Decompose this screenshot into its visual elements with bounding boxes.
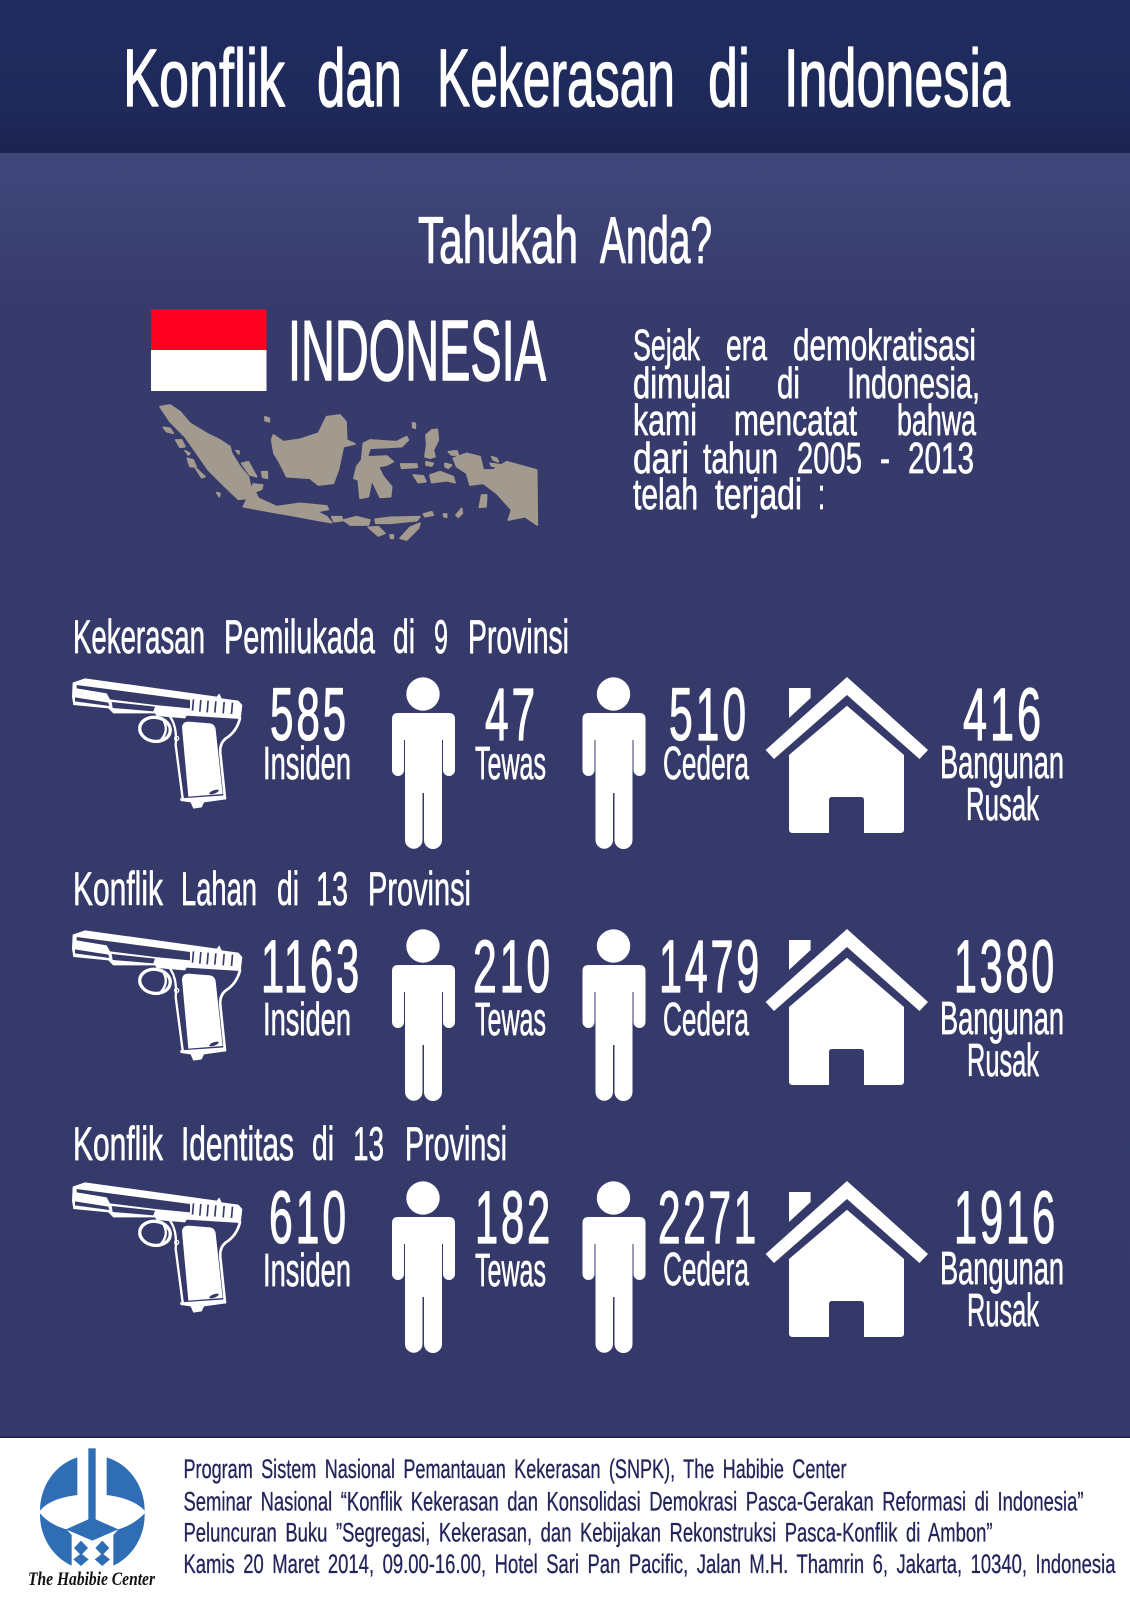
- stat: 1479 cedera: 1479: [659, 925, 762, 1008]
- title: dan: [317, 33, 402, 124]
- intro paragraph: :: [818, 470, 825, 519]
- stat: 1916 bangunan rusak: Rusak: [967, 1284, 1040, 1336]
- title: Kekerasan: [437, 33, 675, 124]
- panel: Konflik Identitas: [72, 1117, 1064, 1353]
- intro paragraph: [633, 321, 980, 519]
- intro paragraph: di: [777, 359, 800, 408]
- header band: [0, 0, 1130, 153]
- stat: 510 cedera: 510: [669, 673, 749, 756]
- intro paragraph: demokratisasi: [793, 321, 976, 370]
- heading: row 1: Pemilukada: [224, 610, 376, 663]
- title: Indonesia: [784, 33, 1010, 124]
- icon: house: [766, 1181, 928, 1337]
- footer text block: [184, 1454, 1116, 1579]
- stat: 585 insiden: 585: [270, 673, 349, 756]
- subheading: Tahukah Anda: Tahukah: [418, 203, 578, 277]
- intro paragraph: kami: [633, 396, 697, 445]
- stat: 610 insiden: Insiden: [263, 1244, 351, 1296]
- heading: row 2: 13: [316, 862, 348, 915]
- icon: Indonesian flag: [151, 310, 266, 391]
- stat: 1479 cedera: [659, 925, 762, 1045]
- stat: 1479 cedera: Cedera: [663, 993, 749, 1045]
- intro paragraph: 2013: [908, 434, 974, 483]
- intro paragraph: -: [880, 434, 890, 483]
- stat: 510 cedera: [663, 673, 749, 789]
- stat: 610 insiden: 610: [269, 1176, 349, 1259]
- icon: person killed: [392, 1181, 455, 1353]
- stat: 1163 insiden: [261, 925, 362, 1045]
- stat: 1163 insiden: 1163: [261, 925, 362, 1008]
- map of Indonesia: [160, 405, 537, 540]
- icon: house: [766, 677, 928, 833]
- footer panel: [0, 1436, 1130, 1600]
- stat: 47 tewas: [475, 673, 546, 789]
- heading: row 3: Provinsi: [405, 1117, 507, 1170]
- subheading: Tahukah Anda: Anda?: [600, 203, 712, 277]
- title: [123, 33, 1010, 124]
- heading: row 3: di: [312, 1117, 334, 1170]
- stat: 47 tewas: 47: [485, 673, 538, 756]
- intro paragraph: tahun: [703, 434, 778, 483]
- intro paragraph: terjadi: [715, 470, 802, 519]
- stat: 1163 insiden: Insiden: [263, 993, 351, 1045]
- icon: house: [766, 929, 928, 1085]
- stat: 416 bangunan rusak: [940, 673, 1064, 830]
- title: di: [708, 33, 750, 124]
- icon: person killed: [392, 929, 455, 1101]
- intro paragraph: dari: [633, 434, 689, 483]
- stat: 510 cedera: Cedera: [663, 737, 749, 789]
- stat: 610 insiden: [263, 1176, 351, 1296]
- heading: row 3: 13: [353, 1117, 384, 1170]
- stat: 210 tewas: [473, 925, 553, 1045]
- stat: 585 insiden: [263, 673, 351, 789]
- heading: row 3: [73, 1117, 507, 1170]
- stat: 210 tewas: Tewas: [475, 993, 546, 1045]
- icon: person injured: [582, 929, 646, 1101]
- stat: 182 tewas: [475, 1176, 553, 1296]
- heading: row 2: Provinsi: [368, 862, 471, 915]
- intro paragraph: 2005: [797, 434, 862, 483]
- icon: person injured: [582, 677, 646, 849]
- heading: row 2: Lahan: [181, 862, 257, 915]
- intro paragraph: era: [726, 321, 767, 370]
- heading: row 2: Konflik: [73, 862, 163, 915]
- heading: row 1: di: [393, 610, 415, 663]
- heading: row 3: Identitas: [181, 1117, 294, 1170]
- stat: 416 bangunan rusak: 416: [963, 673, 1044, 756]
- stat: 585 insiden: Insiden: [263, 737, 351, 789]
- icon: pistol: [72, 1182, 242, 1313]
- country name: INDONESIA: [288, 304, 546, 399]
- intro paragraph: Indonesia,: [847, 359, 980, 408]
- intro paragraph: bahwa: [897, 396, 976, 445]
- icon: pistol: [72, 678, 242, 809]
- heading: row 2: [73, 862, 471, 915]
- stat: 2271 cedera: 2271: [658, 1176, 759, 1259]
- icon: person injured: [582, 1181, 646, 1353]
- stat: 47 tewas: Tewas: [475, 737, 546, 789]
- stat: 2271 cedera: Cedera: [663, 1243, 749, 1295]
- stat: 1380 bangunan rusak: Rusak: [967, 1034, 1040, 1086]
- icon: person killed: [392, 677, 455, 849]
- stat: 182 tewas: Tewas: [475, 1244, 546, 1296]
- intro paragraph: dimulai: [633, 359, 731, 408]
- heading: row 3: Konflik: [73, 1117, 163, 1170]
- intro paragraph: Sejak: [633, 321, 701, 370]
- logo: The Habibie Center: The Habibie Center: [28, 1569, 155, 1590]
- stat: 182 tewas: 182: [475, 1176, 553, 1259]
- stat: 416 bangunan rusak: Rusak: [966, 778, 1040, 830]
- title: Konflik: [123, 33, 286, 124]
- heading: row 1: 9: [434, 610, 448, 663]
- stat: 210 tewas: 210: [473, 925, 553, 1008]
- intro paragraph: mencatat: [734, 396, 857, 445]
- stat: 2271 cedera: [658, 1176, 759, 1295]
- panel: Konflik Lahan: [72, 862, 1064, 1101]
- heading: row 1: Kekerasan: [73, 610, 205, 663]
- intro paragraph: telah: [633, 470, 698, 519]
- heading: row 1: Provinsi: [468, 610, 569, 663]
- icon: pistol: [72, 930, 242, 1061]
- stat: 1916 bangunan rusak: [940, 1176, 1064, 1336]
- stat: 1380 bangunan rusak: [940, 925, 1064, 1086]
- panel: Kekerasan Pemilukada: [72, 610, 1064, 849]
- heading: row 2: di: [277, 862, 299, 915]
- logo: The Habibie Center: [28, 1448, 155, 1590]
- heading: row 1: [73, 610, 569, 663]
